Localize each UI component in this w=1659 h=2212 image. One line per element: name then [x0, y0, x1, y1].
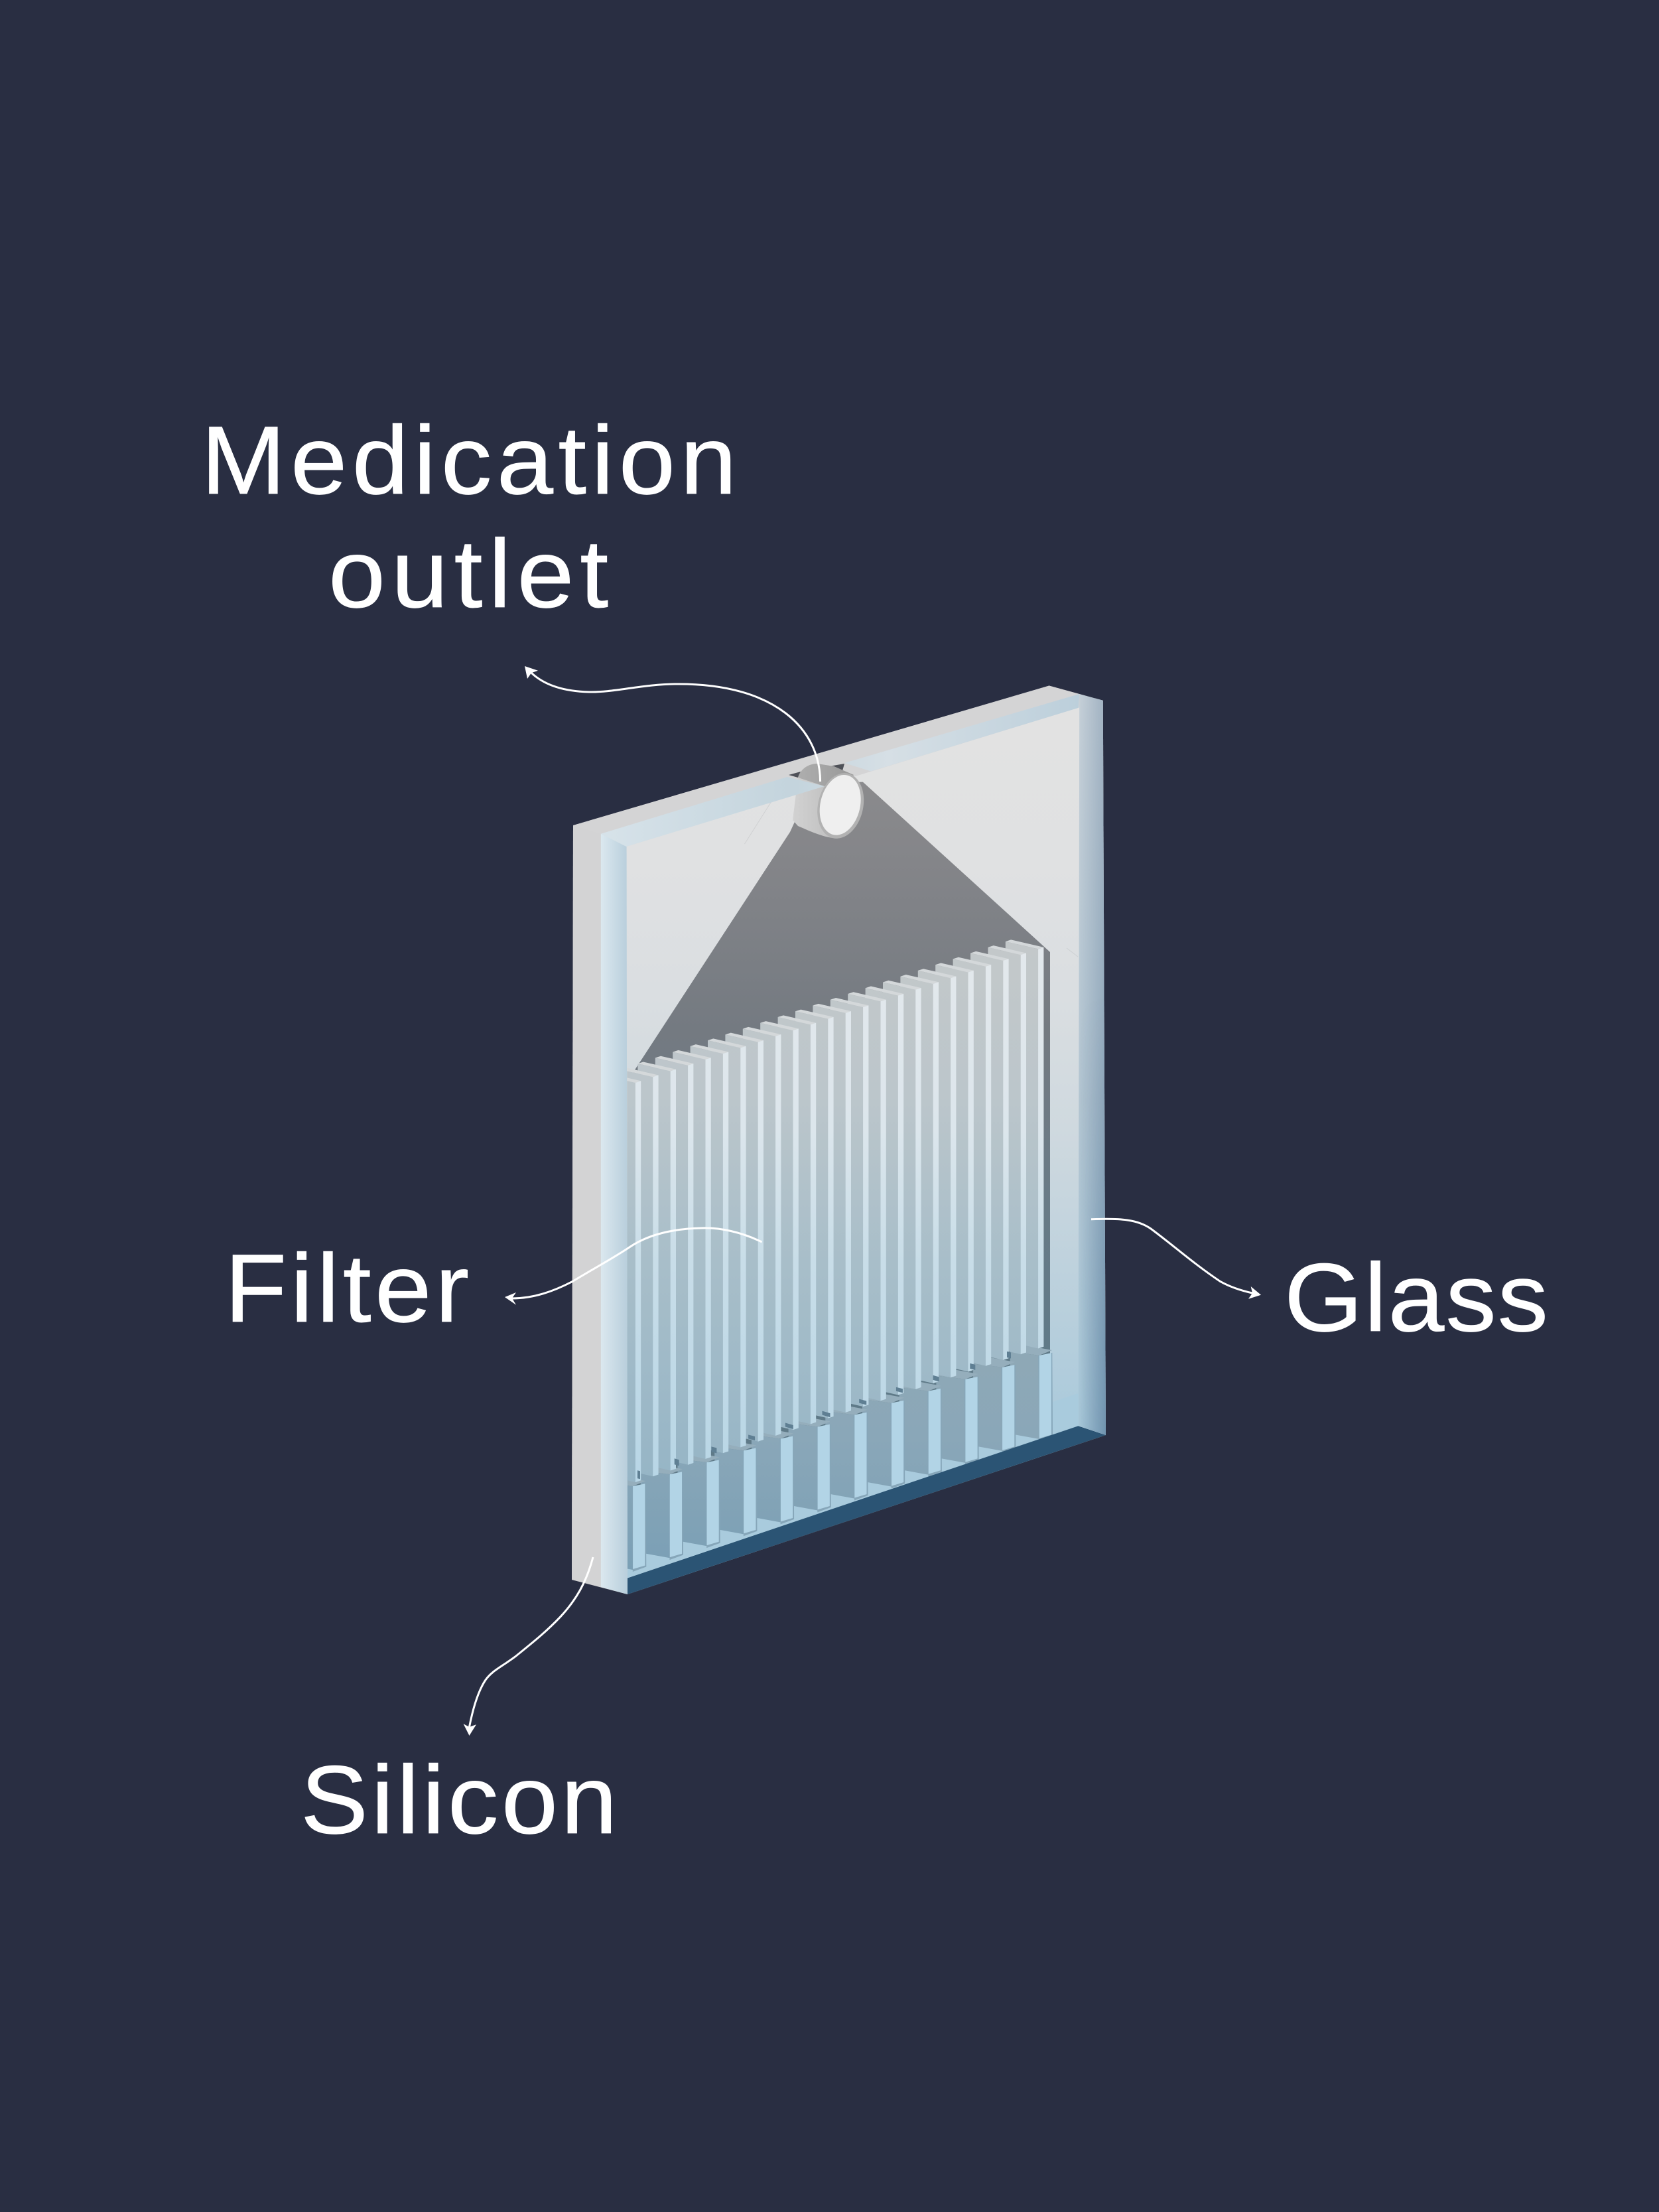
label: Filter: Filter [224, 1234, 472, 1342]
arrow: filter [505, 1228, 762, 1305]
arrow: glass [1091, 1219, 1261, 1299]
support block faces [604, 1352, 1039, 1570]
label: Medication outlet [201, 406, 742, 628]
infographic canvas [209, 423, 1545, 1834]
label: Glass: Glass [1284, 1243, 1550, 1351]
outlet lens rim [811, 768, 870, 843]
glass top edge left [601, 777, 825, 847]
support block edge rims [632, 1353, 1053, 1572]
support block tops [604, 1346, 1052, 1486]
silicon left edge [572, 825, 601, 1587]
outlet lens [814, 771, 866, 839]
outlet cylinder [793, 764, 854, 838]
fin top faces [603, 939, 1043, 1083]
arrow: silicon [464, 1557, 593, 1736]
glass right edge [1079, 694, 1106, 1435]
faint seam lines [744, 778, 1078, 957]
dark blue base edge [628, 1426, 1106, 1594]
label: Silicon: Silicon [300, 1746, 620, 1854]
label: Medication outlet: Medication [201, 406, 742, 514]
label: Medication outlet: outlet [328, 519, 614, 628]
filter structure [627, 939, 1053, 1572]
dark medication chamber [628, 782, 1050, 1493]
support block light edges [633, 1353, 1051, 1569]
back panel [626, 707, 1080, 1578]
fin front faces [603, 941, 1039, 1482]
glass left edge [601, 834, 628, 1594]
dark gaps above blocks [637, 1351, 1011, 1479]
silicon top edge [573, 686, 1079, 834]
arrow: medication outlet [525, 666, 821, 782]
device illustration [572, 686, 1106, 1594]
glass top edge right [844, 694, 1079, 771]
floor [628, 1393, 1079, 1578]
outlet notches [789, 764, 844, 778]
fin light edges [635, 947, 1043, 1482]
device base silhouette [572, 686, 1106, 1594]
